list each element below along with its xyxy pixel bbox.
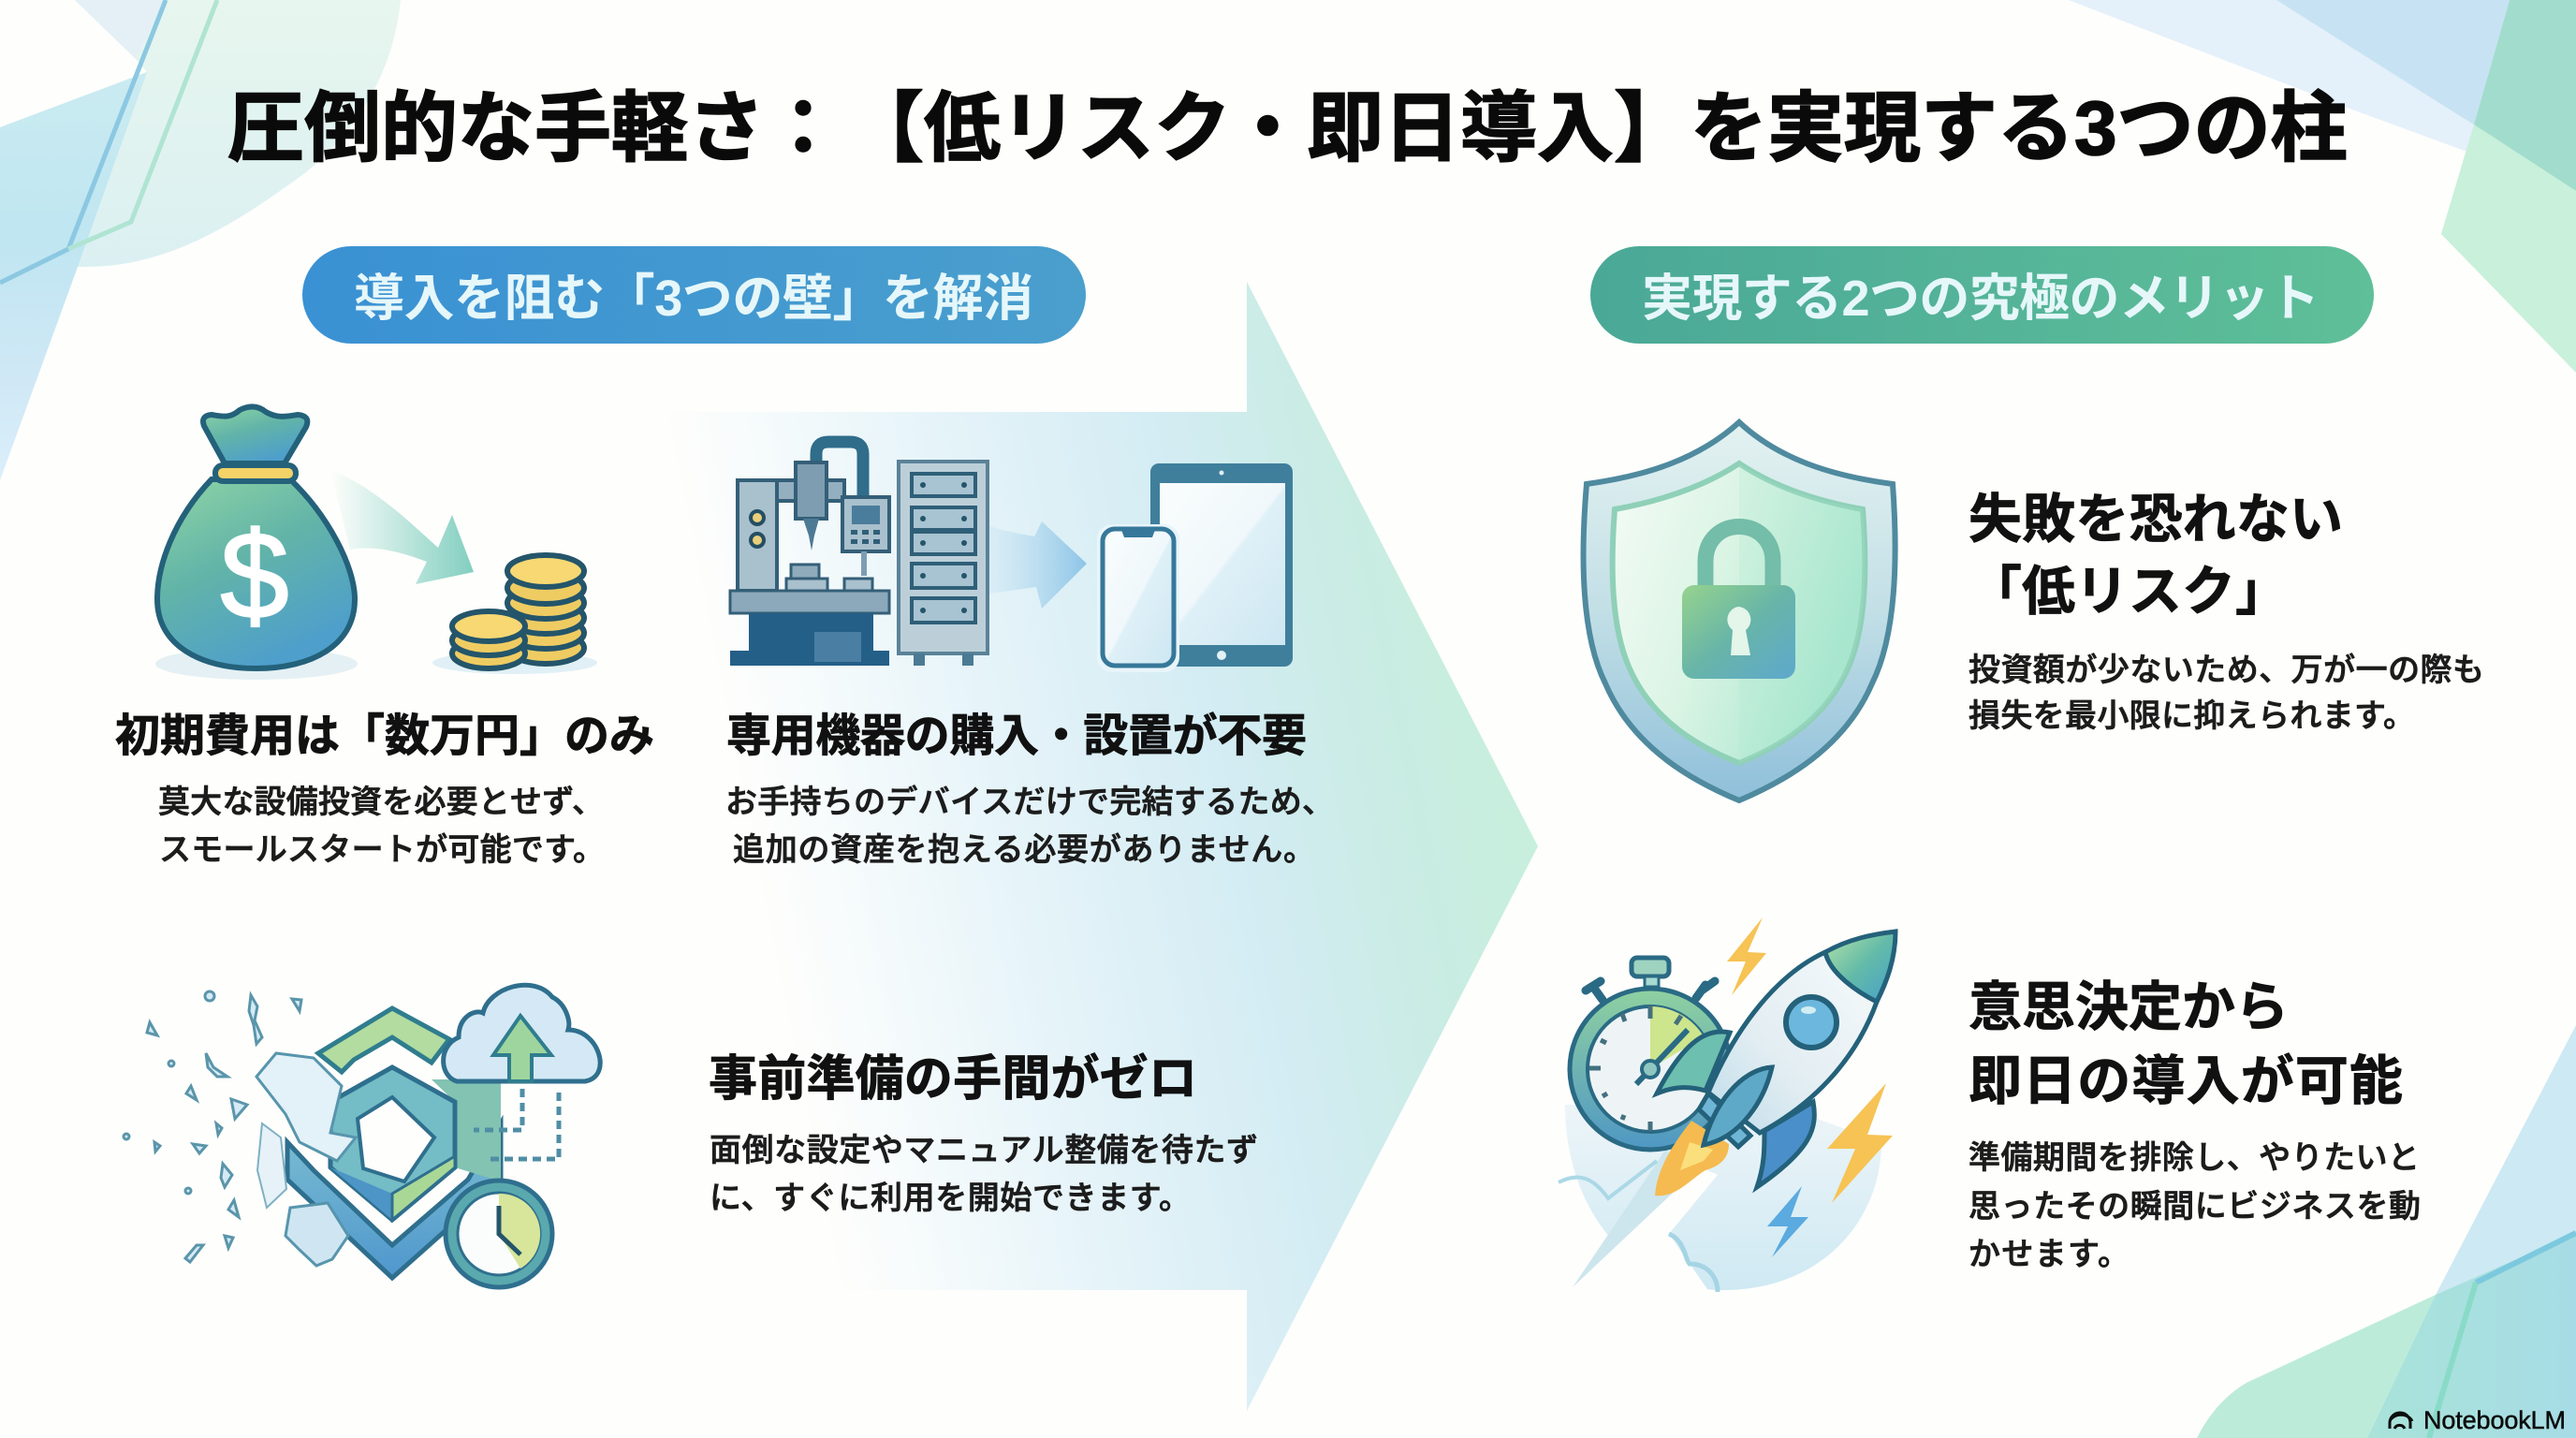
section pill: right: 実現する2つの究極のメリット (1642, 271, 2320, 327)
title: 【低リスク・ (847, 86, 1306, 171)
section pill: left (302, 246, 1086, 344)
text block: initial cost: 莫大な設備投資を必要とせず、 (158, 785, 604, 820)
text block: zero preparation: 事前準備の手間がゼロ (709, 1052, 1197, 1107)
text block: zero preparation (709, 1052, 1258, 1216)
text block: same-day adoption: 即日の導入が可能 (1969, 1051, 2403, 1111)
icon: shattered blocks, cloud and clock (124, 985, 600, 1287)
text block: initial cost: 初期費用は「数万円」のみ (115, 712, 654, 761)
text block: no dedicated equipment (725, 712, 1334, 868)
text block: low risk: 投資額が少ないため、万が一の際も (1969, 653, 2484, 688)
text block: same-day adoption: 準備期間を排除し、やりたいと (1969, 1140, 2420, 1176)
icon: money bag to coins (155, 406, 597, 680)
title: 圧倒的な手軽さ： (227, 86, 842, 171)
text block: initial cost (115, 712, 654, 868)
icon: shield with padlock (1584, 422, 1895, 800)
large transition arrow (599, 282, 1538, 1411)
text block: low risk: 損失を最小限に抑えられます。 (1969, 698, 2415, 734)
section pill: left: 導入を阻む「3つの壁」を解消 (354, 271, 1033, 327)
text block: zero preparation: に、すぐに利用を開始できます。 (710, 1181, 1191, 1216)
text block: low risk: 失敗を恐れない (1969, 490, 2343, 550)
text block: initial cost: スモールスタートが可能です。 (159, 832, 605, 868)
text block: same-day adoption: かせます。 (1969, 1237, 2130, 1272)
section pill: right (1590, 246, 2374, 344)
background shapes: top left (0, 0, 401, 480)
text block: same-day adoption: 意思決定から (1969, 977, 2289, 1037)
title: 即日導入】 (1307, 86, 1690, 171)
text block: no dedicated equipment: お手持ちのデバイスだけで完結するため、 (725, 785, 1334, 820)
text block: low risk (1969, 490, 2484, 734)
text block: same-day adoption: 思ったその瞬間にビジネスを動 (1969, 1189, 2421, 1225)
icon: machinery to devices (730, 442, 1293, 672)
icon: money bag to coins: $ (220, 506, 289, 644)
text block: same-day adoption (1969, 977, 2421, 1272)
text block: low risk: 「低リスク」 (1969, 562, 2289, 622)
text block: zero preparation: 面倒な設定やマニュアル整備を待たず (710, 1133, 1258, 1168)
text block: no dedicated equipment: 専用機器の購入・設置が不要 (726, 712, 1307, 761)
icon: rocket and stopwatch (1559, 917, 1895, 1311)
text block: no dedicated equipment: 追加の資産を抱える必要がありません。 (733, 832, 1315, 868)
title: を実現する3つの柱 (1690, 86, 2348, 171)
background shapes: top right (2069, 0, 2576, 373)
NotebookLM watermark: NotebookLM (2423, 1406, 2566, 1434)
background shapes: bottom right (2197, 1025, 2576, 1438)
